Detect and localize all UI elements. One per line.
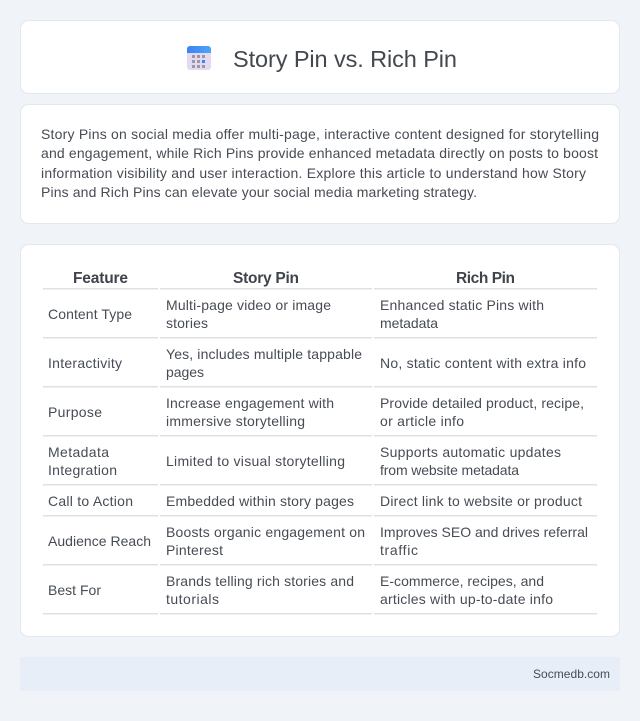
panel: comparison table bbox=[20, 244, 620, 636]
row: Content Type bbox=[48, 297, 544, 331]
row: Audience Reach: Audience Reach bbox=[48, 533, 151, 549]
row: Call to Action: Call to Action bbox=[48, 493, 133, 509]
row: Interactivity: No, static content with extra info bbox=[380, 355, 586, 371]
icon: calendar bbox=[187, 46, 211, 70]
row: Best For: E-commerce, recipes, and bbox=[380, 573, 544, 589]
table header: Feature bbox=[73, 270, 128, 287]
panel: intro text: Pins and Rich Pins can elevate your social media marketing strategy. bbox=[41, 184, 477, 200]
row: Purpose: Purpose bbox=[48, 404, 102, 420]
row: Audience Reach: traffic bbox=[380, 542, 418, 558]
row: Best For: Best For bbox=[48, 582, 101, 598]
row: Best For bbox=[48, 573, 553, 607]
panel: intro text: and engagement, while Rich Pins provide enhanced metadata directly on posts to boost bbox=[41, 145, 598, 161]
row: Content Type: Multi-page video or image bbox=[166, 297, 331, 313]
row: Audience Reach bbox=[48, 524, 588, 558]
row: Purpose: immersive storytelling bbox=[166, 413, 305, 429]
row: Metadata Integration: Limited to visual storytelling bbox=[166, 453, 345, 469]
panel: intro text: information visibility and user interaction. Explore this article to understand how Story bbox=[41, 165, 586, 181]
row: Best For: articles with up-to-date info bbox=[380, 591, 553, 607]
panel: title card bbox=[20, 20, 620, 94]
row: Metadata Integration: Metadata bbox=[48, 444, 109, 460]
row: Audience Reach: Pinterest bbox=[166, 542, 223, 558]
footer: Socmedb.com bbox=[533, 667, 610, 681]
row: Best For: tutorials bbox=[166, 591, 219, 607]
row: Purpose: Increase engagement with bbox=[166, 395, 334, 411]
table header bbox=[73, 270, 515, 287]
row: Audience Reach: Improves SEO and drives referral bbox=[380, 524, 588, 540]
row: Call to Action: Embedded within story pages bbox=[166, 493, 354, 509]
table header: Story Pin bbox=[233, 270, 299, 287]
row: Best For: Brands telling rich stories and bbox=[166, 573, 354, 589]
row: Audience Reach: Boosts organic engagement on bbox=[166, 524, 365, 540]
footer bbox=[20, 657, 620, 691]
row: Content Type: Enhanced static Pins with bbox=[380, 297, 544, 313]
row: Metadata Integration: Integration bbox=[48, 462, 117, 478]
row: Interactivity: Interactivity bbox=[48, 355, 122, 371]
row: Content Type: Content Type bbox=[48, 306, 132, 322]
row: Metadata Integration: Supports automatic updates bbox=[380, 444, 561, 460]
row: Metadata Integration: from website metadata bbox=[380, 462, 519, 478]
row: Interactivity bbox=[48, 346, 586, 380]
row: Content Type: metadata bbox=[380, 315, 438, 331]
row: Interactivity: Yes, includes multiple tappable bbox=[166, 346, 362, 362]
row: Metadata Integration bbox=[48, 444, 561, 478]
row: Interactivity: pages bbox=[166, 364, 204, 380]
panel: intro text bbox=[20, 104, 620, 224]
row: Content Type: stories bbox=[166, 315, 208, 331]
row: Purpose bbox=[48, 395, 584, 429]
row: Purpose: Provide detailed product, recipe, bbox=[380, 395, 584, 411]
row: Call to Action bbox=[48, 493, 582, 509]
title: Story Pin vs. Rich Pin bbox=[233, 46, 457, 72]
row: Purpose: or article info bbox=[380, 413, 464, 429]
table header: Rich Pin bbox=[456, 270, 515, 287]
row: Call to Action: Direct link to website or product bbox=[380, 493, 582, 509]
panel: intro text: Story Pins on social media offer multi-page, interactive content designed for storytelling bbox=[41, 126, 599, 142]
